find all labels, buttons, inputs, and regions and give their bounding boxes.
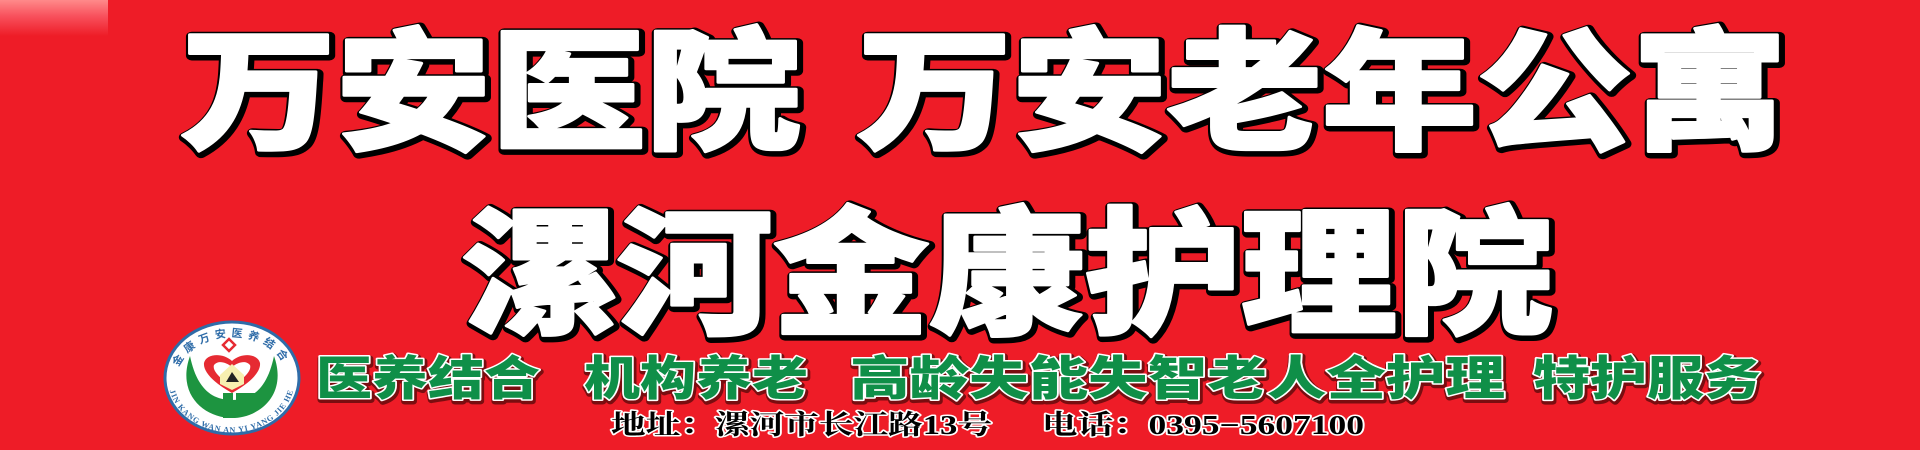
logo latin ring text: JIN KANG WAN AN YI YANG JIE HE bbox=[170, 390, 293, 432]
slogan: 高龄失能失智老人全护理: 高龄失能失智老人全护理 bbox=[851, 354, 1506, 407]
logo red heart bbox=[204, 355, 260, 393]
title line 2: 漯河金康护理院: 漯河金康护理院 bbox=[461, 199, 1553, 353]
logo disc bbox=[165, 322, 299, 434]
title line 1 left: 万安医院: 万安医院 bbox=[183, 22, 803, 169]
slogan: 特护服务: 特护服务 bbox=[1533, 352, 1761, 405]
logo green stem bbox=[223, 393, 256, 418]
title line 1 left: 万安医院: 万安医院 bbox=[181, 20, 801, 167]
logo green crescent bbox=[186, 356, 278, 418]
corner highlight bbox=[0, 0, 108, 36]
address: 地址：漯河市长江路13号 bbox=[611, 410, 992, 440]
slogan: 医养结合: 医养结合 bbox=[317, 354, 541, 407]
slogan: 高龄失能失智老人全护理: 高龄失能失智老人全护理 bbox=[850, 352, 1505, 405]
slogan: 医养结合: 医养结合 bbox=[316, 352, 540, 405]
logo centre figure bbox=[220, 364, 244, 390]
slogan: 机构养老: 机构养老 bbox=[585, 354, 809, 407]
logo bbox=[164, 320, 300, 436]
slogan: 机构养老: 机构养老 bbox=[584, 352, 808, 405]
slogan: 特护服务: 特护服务 bbox=[1534, 354, 1762, 407]
phone: 电话：0395−5607100 bbox=[1042, 410, 1364, 440]
logo chinese ring text: 金康万安医养结合 bbox=[173, 328, 288, 367]
title line 1 right: 万安老年公寓: 万安老年公寓 bbox=[859, 22, 1789, 169]
title line 2: 漯河金康护理院: 漯河金康护理院 bbox=[463, 201, 1555, 355]
title line 1 right: 万安老年公寓: 万安老年公寓 bbox=[857, 20, 1787, 167]
logo red cross bbox=[223, 339, 235, 351]
